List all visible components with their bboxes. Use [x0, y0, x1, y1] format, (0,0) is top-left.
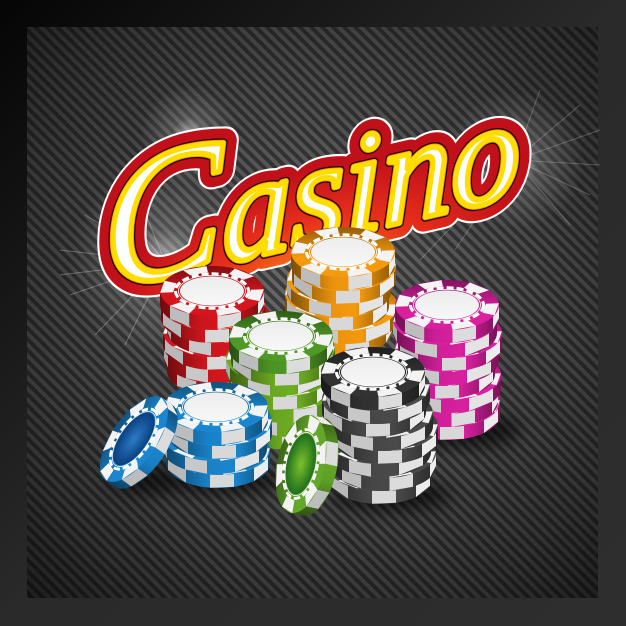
light glow top of C	[140, 85, 240, 185]
light burst left	[60, 167, 260, 357]
blue chip stack	[163, 382, 272, 488]
magenta chip stack	[391, 280, 502, 440]
leaning blue chip	[87, 385, 191, 500]
shadows under stacks	[110, 412, 520, 511]
leaning green chip	[267, 410, 347, 520]
neon title: Casino: Casino	[101, 28, 521, 332]
neon title: Casino: Casino	[101, 28, 521, 332]
light burst right	[420, 90, 600, 260]
black chip stack	[321, 347, 438, 504]
red chip stack	[160, 266, 271, 396]
neon title: Casino: Casino	[101, 28, 521, 332]
green chip stack	[226, 311, 342, 450]
neon title: Casino: Casino	[101, 28, 521, 332]
neon title: Casino: Casino	[101, 28, 521, 332]
orange chip stack	[285, 227, 398, 356]
